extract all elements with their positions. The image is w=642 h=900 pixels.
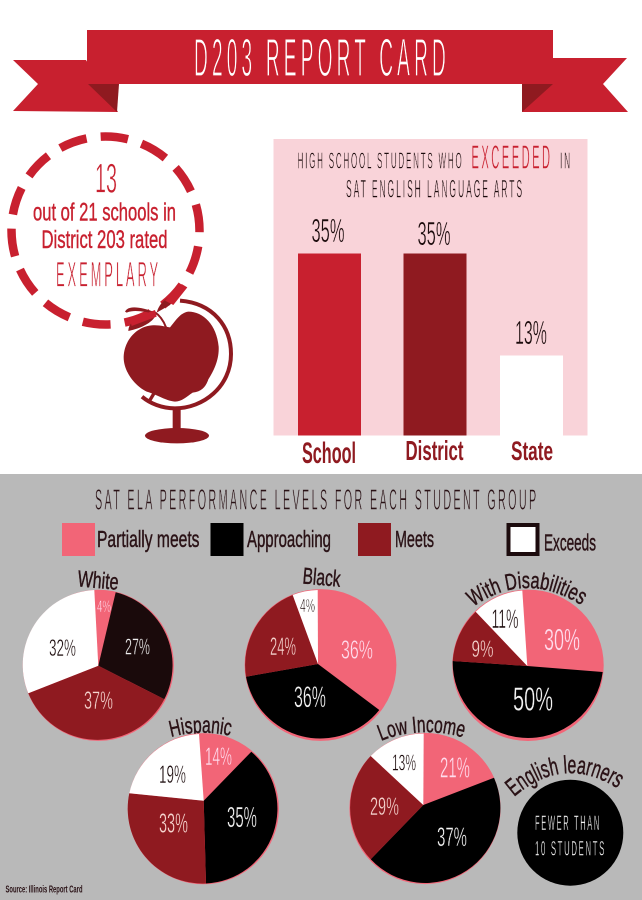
bar: District 35% xyxy=(404,215,466,466)
dashed circle callout: EXEMPLARY xyxy=(56,256,161,294)
bar: School 35%: 35% xyxy=(312,212,344,249)
pie: With Disabilities: 30% xyxy=(544,622,580,657)
pie: Hispanic xyxy=(128,717,279,884)
pie: White xyxy=(23,565,174,741)
pie: Low Income: Low Income xyxy=(376,716,465,741)
pie: Low Income: 29% xyxy=(370,793,399,821)
legend: Partially meets xyxy=(97,526,200,552)
badge: English learners: English learners xyxy=(504,755,623,796)
pie: Hispanic: 33% xyxy=(159,808,188,838)
panel: SAT ELA exceeded bar chart xyxy=(274,138,588,470)
chart heading xyxy=(298,138,572,204)
pie: Black: 24% xyxy=(270,633,296,661)
pie: Low Income: 37% xyxy=(437,822,467,852)
pie: Black: 4% xyxy=(300,596,315,616)
pie: Black: 36% xyxy=(294,681,326,714)
pie: White: 37% xyxy=(84,687,113,715)
pie: Black xyxy=(245,563,396,741)
pie: Low Income: 21% xyxy=(440,752,470,784)
bar: State 13% xyxy=(500,314,563,466)
pie: White: 4% xyxy=(97,597,111,616)
bar: District 35%: 35% xyxy=(418,215,450,252)
pie: White: White xyxy=(77,565,120,595)
pie: With Disabilities: 11% xyxy=(492,604,518,634)
source note: Source: Illinois Report Card xyxy=(6,884,82,896)
pie: Black: Black xyxy=(302,563,342,592)
pie: Black: 36% xyxy=(341,634,373,664)
icon: apple globe xyxy=(124,284,231,443)
bar: State 13%: State xyxy=(511,436,553,466)
legend: Meets xyxy=(395,526,434,552)
pie: Low Income xyxy=(349,716,501,884)
legend: Approaching xyxy=(247,526,331,552)
dashed circle callout: 13 xyxy=(95,154,117,202)
pie: With Disabilities: 9% xyxy=(472,636,494,663)
pie: White: 27% xyxy=(125,634,150,660)
pie: Hispanic: 14% xyxy=(205,743,232,771)
dashed circle callout: District 203 rated xyxy=(42,226,168,254)
legend xyxy=(62,523,596,556)
pie: With Disabilities: 50% xyxy=(513,680,553,718)
pie: Hispanic: Hispanic xyxy=(168,717,232,737)
pie: Low Income: 13% xyxy=(392,750,416,776)
panel: SAT ELA exceeded bar chart: IN xyxy=(560,148,572,174)
bar: District 35%: District xyxy=(406,435,464,466)
pie: Hispanic: 35% xyxy=(227,802,257,834)
pie: With Disabilities xyxy=(452,571,604,741)
pie: With Disabilities: With Disabilities xyxy=(464,571,586,606)
dashed circle callout xyxy=(12,136,200,324)
legend: Exceeds xyxy=(544,530,596,556)
bar: State 13%: 13% xyxy=(515,314,547,351)
pie: White: 32% xyxy=(49,635,76,662)
bar: School 35%: School xyxy=(302,437,356,470)
badge: English learners xyxy=(504,755,624,886)
panel: performance levels xyxy=(0,474,642,900)
title banner xyxy=(13,28,628,112)
dashed circle callout: out of 21 schools in xyxy=(33,198,176,226)
pie: Hispanic: 19% xyxy=(159,761,186,789)
bar: School 35% xyxy=(298,212,361,470)
